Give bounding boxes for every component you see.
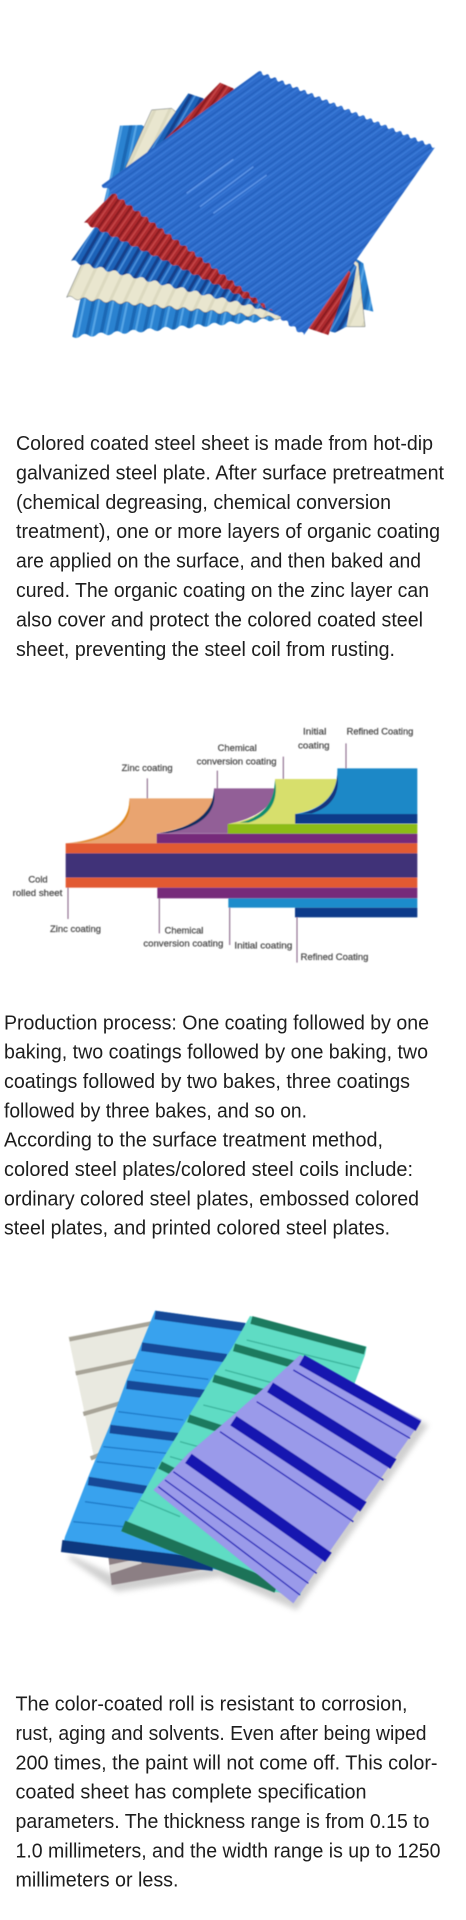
diagram labels: coating [298,740,330,750]
text block: intro paragraph: Colored coated steel sheet is made from hot-dip [16,433,433,455]
panel shadows [68,1417,428,1610]
text block: properties and specifications: The color-coated roll is resistant to corrosion, [16,1694,408,1716]
text block: intro paragraph: sheet, preventing the steel coil from rusting. [16,639,395,661]
text block: production process [4,1012,429,1240]
image: stack of corrugated coated steel sheets [67,71,435,338]
text block: production process: steel plates, and printed colored steel plates. [4,1218,390,1240]
diagram labels: Zinc coating [50,924,101,934]
text block: production process: According to the surface treatment method, [4,1130,383,1152]
leader lines [68,743,346,963]
diagram labels: Zinc coating [122,763,173,773]
text block: properties and specifications [16,1694,440,1892]
text block: production process: coatings followed by two bakes, three coatings [4,1071,410,1093]
sheet: light blue [72,125,373,338]
text block: intro paragraph [16,433,444,661]
text block: production process: baking, two coatings followed by one baking, two [4,1042,428,1064]
diagram labels: Refined Coating [301,952,368,962]
sheet: main blue [102,71,435,335]
diagram labels: rolled sheet [13,888,63,898]
diagram labels: Initial coating [234,941,292,951]
text block: properties and specifications: coated sheet has complete specification [16,1782,366,1804]
diagram labels: conversion coating [197,756,277,766]
layer: chemical conversion coating top [157,788,275,833]
diagram labels: Cold [28,875,48,885]
diagram labels: Refined Coating [347,726,413,736]
text block: production process: followed by three bakes, and so on. [4,1100,307,1122]
diagram: coating layer structure [13,726,417,963]
text block: properties and specifications: 1.0 millimeters, and the width range is up to 1250 [16,1840,440,1862]
diagram labels [13,726,413,962]
text block: properties and specifications: 200 times, the paint will not come off. This color- [16,1752,438,1774]
sheet: cream [67,108,365,327]
text block: intro paragraph: cured. The organic coating on the zinc layer can [16,580,429,602]
layer: zinc coating top [66,798,213,843]
text block: properties and specifications: rust, aging and solvents. Even after being wiped [16,1723,426,1745]
panel: off-white back sheet [68,1322,220,1585]
diagram labels: conversion coating [143,939,223,949]
text block: production process: Production process: One coating followed by one [4,1012,429,1034]
layer: initial coating top [228,779,337,824]
layer: refined coating top [295,768,417,814]
layer bands: stacked coatings and cold rolled sheet [66,814,417,917]
sheet: red [84,83,351,335]
text block: intro paragraph: (chemical degreasing, chemical conversion [16,492,391,514]
text block: production process: colored steel plates/colored steel coils include: [4,1159,413,1181]
text block: intro paragraph: treatment), one or more layers of organic coating [16,521,440,543]
image: trapezoidal colored roof panels [62,1311,428,1610]
text block: production process: ordinary colored steel plates, embossed colored [4,1188,419,1210]
diagram labels: Chemical [218,743,257,753]
sheet: dark blue [71,93,357,333]
diagram labels: Initial [303,726,326,736]
text block: properties and specifications: millimeters or less. [16,1870,178,1892]
text block: intro paragraph: are applied on the surface, and then baked and [16,551,421,573]
text block: intro paragraph: galvanized steel plate. After surface pretreatment [16,462,444,484]
panel: violet sheet [153,1355,422,1603]
diagram labels: Chemical [165,925,203,935]
panel: teal sheet [122,1316,367,1595]
text block: properties and specifications: parameters. The thickness range is from 0.15 to [16,1811,430,1833]
text block: intro paragraph: also cover and protect the colored coated steel [16,610,423,632]
panel: sky-blue sheet [62,1311,247,1570]
